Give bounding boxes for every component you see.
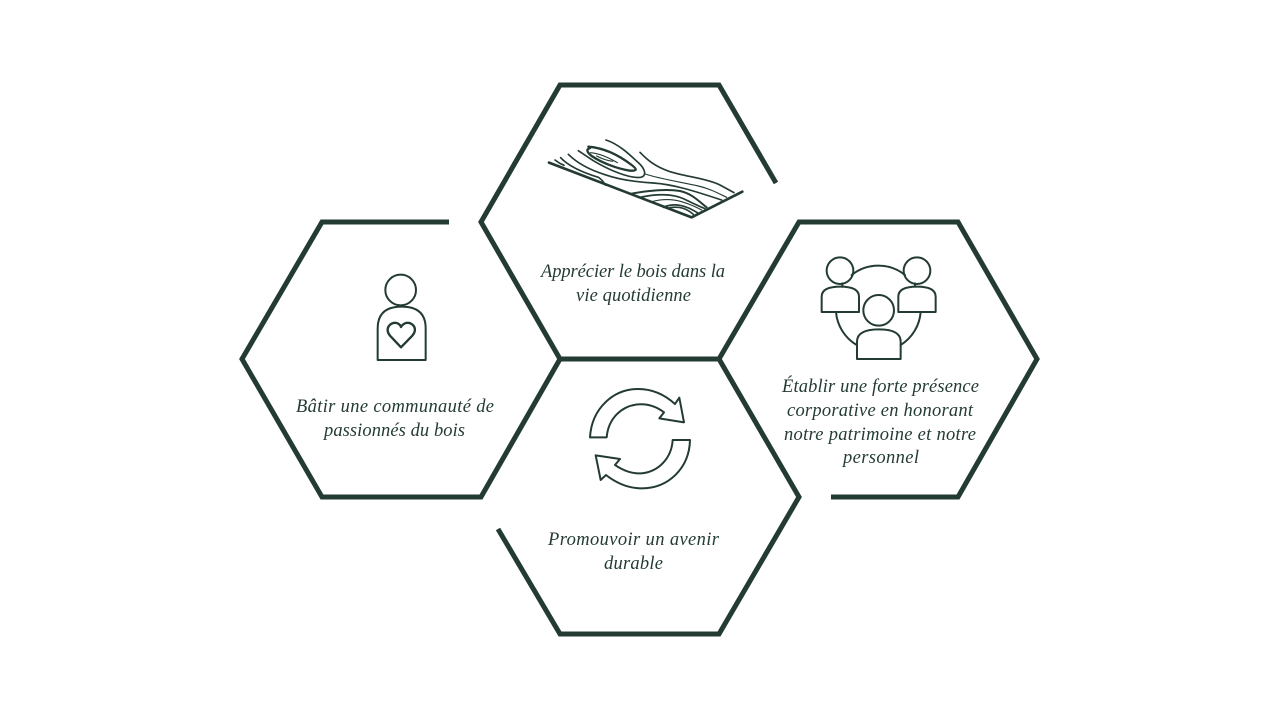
text: corporate presence: Établir une forte présence: [781, 375, 979, 397]
icon: wood plank: [549, 140, 742, 217]
left hexagon outline: [242, 222, 560, 497]
text: appreciate wood: vie quotidienne: [576, 286, 691, 306]
text: sustainable future: durable: [604, 554, 663, 574]
panel: bottom hexagon, sustainable future: [498, 359, 799, 634]
bottom hexagon outline: [498, 359, 799, 634]
text: community: passionnés du bois: [322, 421, 465, 441]
panel: top hexagon, appreciate wood: [481, 85, 776, 359]
right hexagon outline: [719, 222, 1037, 497]
text: sustainable future: Promouvoir un avenir: [547, 530, 720, 550]
icon: three people around a circle: [822, 257, 936, 359]
icon: circular arrows: [590, 389, 690, 488]
panel: left hexagon, community: [242, 222, 560, 497]
text: community: Bâtir une communauté de: [296, 397, 494, 417]
panel: right hexagon, corporate presence: [719, 222, 1037, 497]
text: corporate presence: personnel: [841, 448, 919, 468]
icon: person with heart: [378, 275, 426, 360]
text: corporate presence: notre patrimoine et notre: [784, 425, 976, 445]
top hexagon outline: [481, 85, 776, 359]
text: corporate presence: corporative en honorant: [787, 401, 974, 421]
text: appreciate wood: Apprécier le bois dans la: [539, 262, 725, 282]
